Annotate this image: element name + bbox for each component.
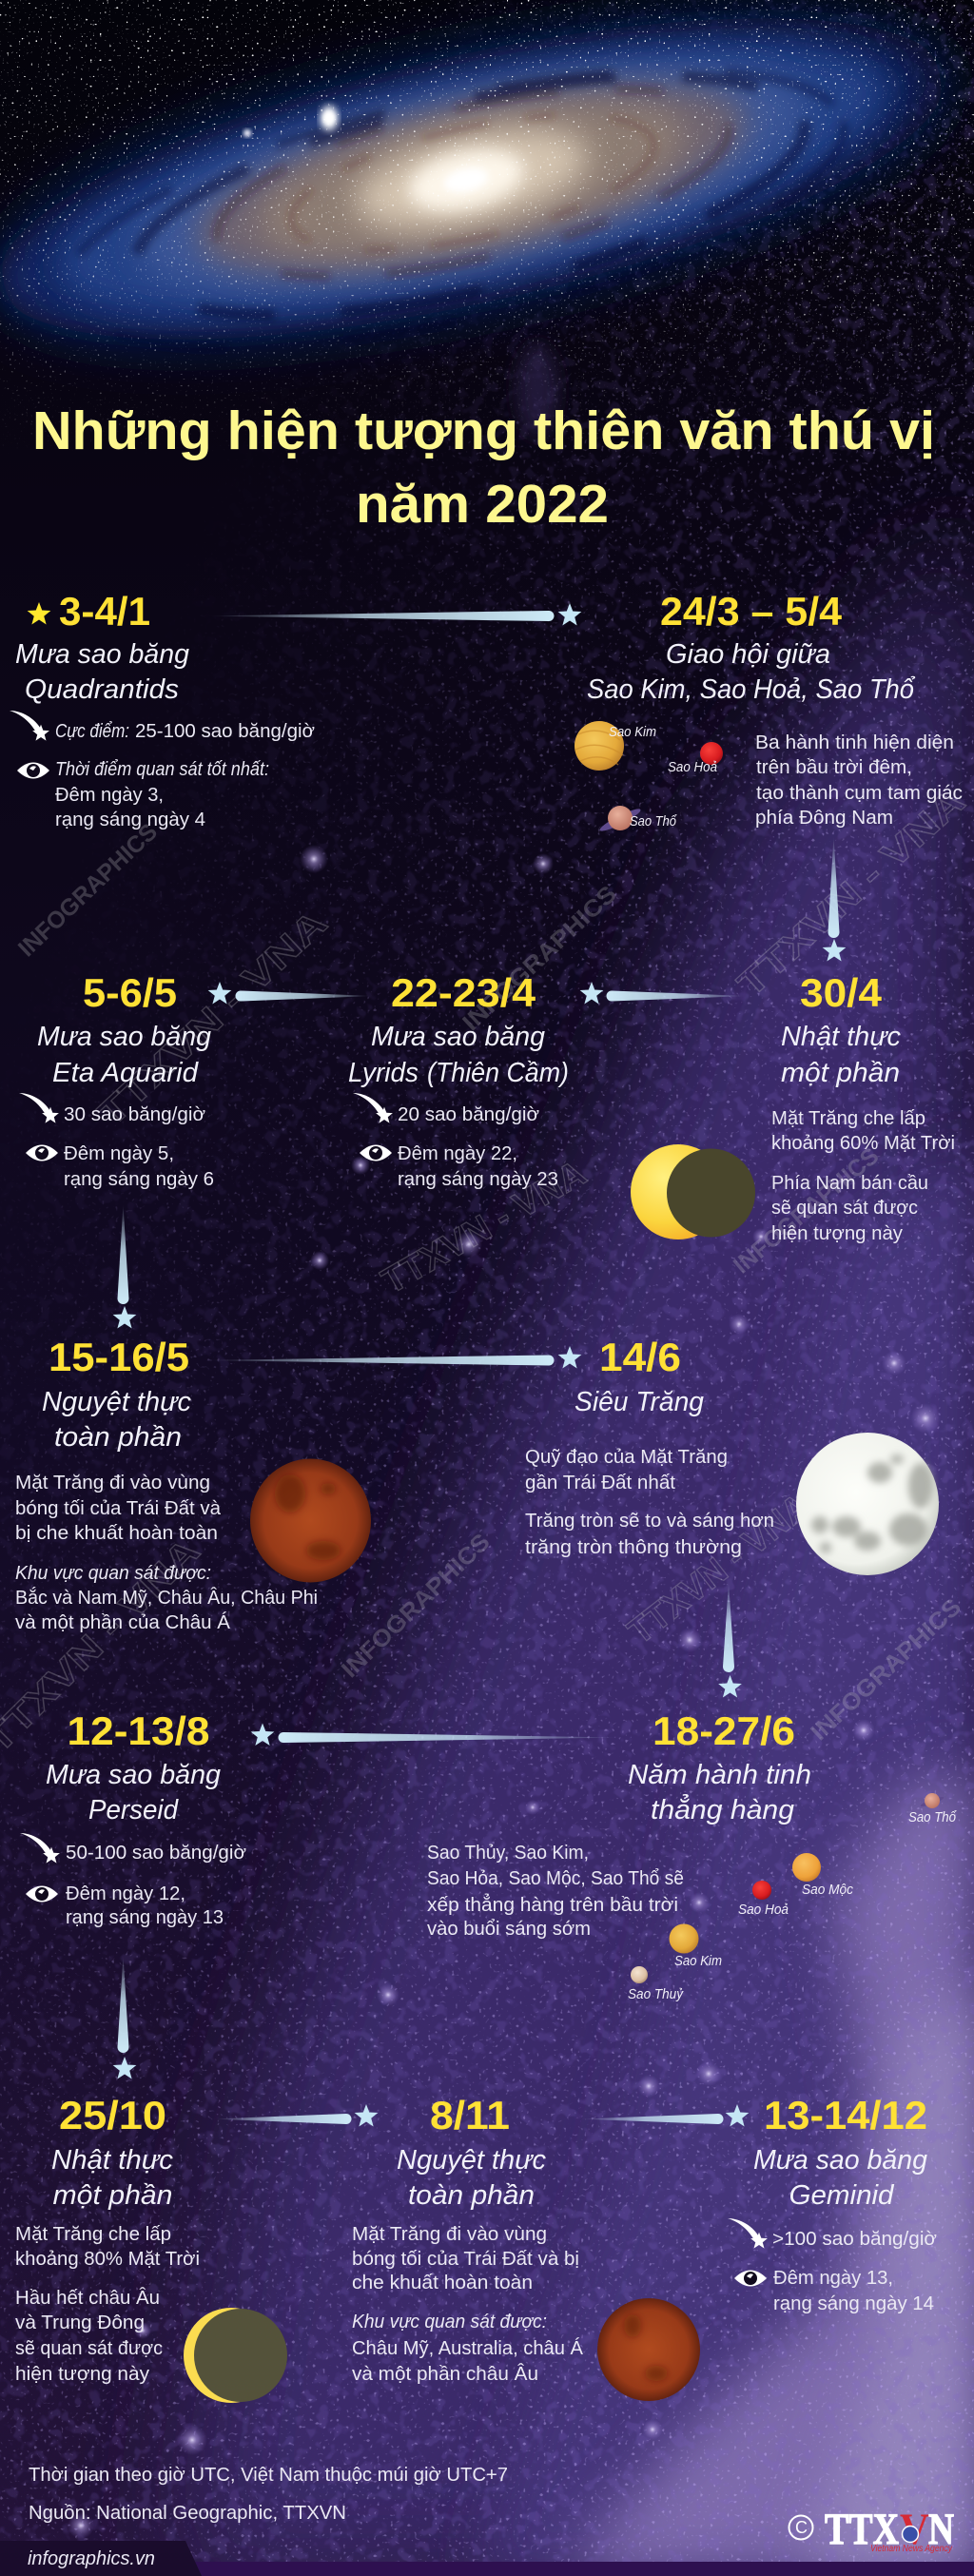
panel: total lunar eclipse 15-16/5 bbox=[15, 1335, 371, 1633]
footnote: time zone and source: Nguồn: National Geographic, TTXVN bbox=[29, 2503, 346, 2524]
description: gần Trái Đất nhất bbox=[525, 1473, 675, 1493]
heading: (Thiên Cầm) bbox=[427, 1058, 569, 1088]
photo: spiral galaxy bbox=[0, 0, 974, 457]
heading: Sao Kim, Sao Hoả, Sao Thổ bbox=[587, 674, 916, 705]
illustration: partial eclipse bbox=[184, 2308, 287, 2403]
viewing time: Đêm ngày 13, bbox=[773, 2268, 893, 2289]
arrow: 24/3 to 30/4 bbox=[823, 836, 846, 962]
arrow: 12-13/8 to 25/10 bbox=[113, 1956, 136, 2079]
description bbox=[15, 2224, 200, 2385]
description: Mặt Trăng che lấp bbox=[771, 1108, 925, 1129]
planet: Venus bbox=[670, 1923, 722, 1969]
rate: 20 sao băng/giờ bbox=[398, 1104, 539, 1125]
watermarks: TTXVN - VNA bbox=[90, 903, 335, 1135]
watermarks: INFOGRAPHICS bbox=[337, 1529, 496, 1683]
heading bbox=[397, 2145, 546, 2211]
watermarks: TTXVN - VNA bbox=[730, 781, 973, 1005]
heading: Lyrids bbox=[348, 1058, 419, 1088]
viewing time bbox=[773, 2268, 934, 2314]
date: 25/10 bbox=[59, 2093, 166, 2137]
logo: TTXVN bbox=[789, 2505, 954, 2554]
date: 3-4/1 bbox=[59, 589, 150, 634]
date: 5-6/5 bbox=[83, 970, 177, 1015]
icon: meteor bbox=[19, 1093, 59, 1123]
viewing time: rạng sáng ngày 14 bbox=[773, 2293, 934, 2314]
footer bar: infographics.vn bbox=[28, 2548, 155, 2569]
watermarks: INFOGRAPHICS bbox=[729, 1142, 884, 1279]
viewing time bbox=[66, 1883, 224, 1928]
description: Bắc và Nam Mỹ, Châu Âu, Châu Phi bbox=[15, 1587, 318, 1609]
description: Mặt Trăng đi vào vùng bbox=[15, 1473, 210, 1493]
description: Hầu hết châu Âu bbox=[15, 2287, 160, 2309]
peak rate: 25-100 sao băng/giờ bbox=[135, 721, 315, 742]
best viewing time: Thời điểm quan sát tốt nhất: bbox=[55, 759, 269, 780]
planet: Mercury: Sao Thuỷ bbox=[628, 1986, 684, 2002]
planet: Mars bbox=[738, 1881, 789, 1918]
heading: Perseid bbox=[88, 1795, 179, 1825]
description: sẽ quan sát được bbox=[15, 2338, 163, 2359]
watermarks: INFOGRAPHICS bbox=[458, 881, 622, 1036]
arrow: 3-4/1 to 24/3 bbox=[205, 603, 581, 626]
viewing time: Đêm ngày 5, bbox=[64, 1143, 174, 1164]
description: Sao Thủy, Sao Kim, bbox=[427, 1843, 589, 1864]
heading: Giao hội giữa bbox=[666, 639, 830, 670]
planet: Jupiter: Sao Mộc bbox=[802, 1882, 853, 1898]
footer bar bbox=[0, 2541, 974, 2576]
viewing time: rạng sáng ngày 23 bbox=[398, 1169, 558, 1190]
description: che khuất hoàn toàn bbox=[352, 2273, 533, 2293]
footnote: time zone and source bbox=[29, 2465, 508, 2524]
planet: Mars: Sao Hoả bbox=[668, 759, 717, 775]
rate: 50-100 sao băng/giờ bbox=[66, 1843, 246, 1864]
planet: Saturn: Sao Thổ bbox=[630, 813, 677, 829]
heading bbox=[51, 2145, 173, 2211]
icon: eye bbox=[734, 2270, 767, 2287]
description: phía Đông Nam bbox=[755, 808, 893, 829]
title bbox=[32, 400, 935, 535]
viewing time bbox=[398, 1143, 558, 1190]
watermarks: INFOGRAPHICS bbox=[806, 1593, 966, 1746]
icon: eye bbox=[17, 763, 49, 778]
date: 12-13/8 bbox=[67, 1708, 209, 1753]
peak rate bbox=[55, 721, 315, 742]
heading: Mưa sao băng bbox=[371, 1022, 545, 1052]
heading: Siêu Trăng bbox=[575, 1387, 704, 1417]
description: Quỹ đạo của Mặt Trăng bbox=[525, 1447, 728, 1468]
description: sẽ quan sát được bbox=[771, 1198, 918, 1219]
footnote: time zone and source: Thời gian theo giờ UTC, Việt Nam thuộc múi giờ UTC+7 bbox=[29, 2465, 508, 2486]
date: 30/4 bbox=[800, 970, 883, 1015]
watermarks: INFOGRAPHICS bbox=[13, 818, 163, 962]
heading bbox=[348, 1022, 569, 1088]
viewing time bbox=[64, 1143, 214, 1190]
arrow: 15-16/5 to 14/6 bbox=[202, 1346, 581, 1369]
arrow: 25/10 to 8/11 bbox=[214, 2104, 378, 2127]
planet: Saturn: Sao Thổ bbox=[908, 1809, 957, 1825]
heading bbox=[753, 2145, 927, 2211]
arrow: 22-23/4 to 5-6/5 bbox=[208, 982, 373, 1005]
viewing time: Đêm ngày 22, bbox=[398, 1143, 517, 1164]
icon: eye bbox=[360, 1145, 392, 1161]
date: 13-14/12 bbox=[764, 2093, 927, 2137]
illustration: blood moon bbox=[597, 2298, 700, 2401]
best viewing time: rạng sáng ngày 4 bbox=[55, 810, 205, 830]
heading bbox=[587, 639, 916, 705]
heading: Nhật thực bbox=[51, 2145, 173, 2176]
description: hiện tượng này bbox=[771, 1223, 903, 1244]
logo: TTXVN: C bbox=[795, 2518, 808, 2537]
heading: thẳng hàng bbox=[651, 1793, 794, 1825]
heading: Năm hành tinh bbox=[628, 1760, 811, 1790]
arrow: 18-27/6 to 12-13/8 bbox=[251, 1724, 621, 1746]
heading: toàn phần bbox=[54, 1422, 182, 1453]
panel: five planets aligned 18-27/6 bbox=[427, 1708, 957, 2002]
rate: 30 sao băng/giờ bbox=[64, 1104, 205, 1125]
icon: yellow star bbox=[28, 602, 50, 625]
description: vào buổi sáng sớm bbox=[427, 1919, 591, 1940]
icon: meteor bbox=[20, 1833, 60, 1864]
description: trăng tròn thông thường bbox=[525, 1537, 742, 1558]
panel: supermoon 14/6 bbox=[525, 1335, 939, 1575]
illustration: partial eclipse bbox=[631, 1144, 755, 1239]
panel: planet conjunction 24/3 - 5/4 bbox=[575, 589, 963, 834]
rate: >100 sao băng/giờ bbox=[772, 2229, 937, 2250]
logo: TTXVN: Vietnam News Agency bbox=[870, 2544, 953, 2554]
heading: Mưa sao băng bbox=[753, 2145, 927, 2176]
date: 8/11 bbox=[430, 2093, 510, 2137]
panel: Perseid 12-13/8 bbox=[20, 1708, 246, 1928]
planet: Saturn bbox=[598, 806, 677, 834]
panel: Quadrantids 3-4/1 bbox=[10, 589, 315, 830]
arrow: 5-6/5 to 15-16/5 bbox=[113, 1204, 136, 1329]
title: Những hiện tượng thiên văn thú vị bbox=[32, 400, 935, 461]
description bbox=[352, 2224, 584, 2385]
panel: Lyrids 22-23/4 bbox=[348, 970, 569, 1190]
description: Mặt Trăng đi vào vùng bbox=[352, 2224, 547, 2245]
heading bbox=[15, 639, 189, 705]
date: 22-23/4 bbox=[391, 970, 536, 1015]
description: Châu Mỹ, Australia, châu Á bbox=[352, 2337, 584, 2359]
best viewing time: Đêm ngày 3, bbox=[55, 785, 164, 806]
date: 14/6 bbox=[599, 1335, 681, 1379]
description: Trăng tròn sẽ to và sáng hơn bbox=[525, 1511, 774, 1532]
watermarks: TTXVN - VNA bbox=[621, 1486, 818, 1652]
description bbox=[755, 732, 963, 829]
heading: Mưa sao băng bbox=[15, 639, 189, 670]
heading: toàn phần bbox=[408, 2180, 535, 2211]
description: bóng tối của Trái Đất và bbox=[15, 1498, 222, 1519]
planet: Saturn bbox=[908, 1793, 957, 1825]
date: 24/3 – 5/4 bbox=[660, 589, 843, 634]
panel: total lunar eclipse 8/11 bbox=[352, 2093, 700, 2401]
logo: TTXVN: TTX bbox=[825, 2505, 899, 2554]
planet: Mercury bbox=[628, 1966, 684, 2002]
date: 18-27/6 bbox=[653, 1708, 795, 1753]
heading: một phần bbox=[53, 2180, 173, 2211]
heading bbox=[37, 1022, 211, 1088]
description bbox=[427, 1843, 684, 1940]
watermarks: TTXVN - VNA bbox=[375, 1153, 593, 1302]
viewing time: Đêm ngày 12, bbox=[66, 1883, 185, 1904]
arrow: 8/11 to 13-14/12 bbox=[581, 2104, 749, 2127]
description: trên bầu trời đêm, bbox=[756, 757, 912, 778]
icon: eye bbox=[26, 1885, 58, 1903]
panel: Eta Aquarid 5-6/5 bbox=[19, 970, 214, 1190]
date: 15-16/5 bbox=[49, 1335, 189, 1379]
description: và Trung Đông bbox=[15, 2313, 145, 2333]
heading: Mưa sao băng bbox=[46, 1760, 221, 1790]
description bbox=[15, 1473, 318, 1633]
icon: meteor bbox=[10, 711, 49, 741]
description: Sao Hỏa, Sao Mộc, Sao Thổ sẽ bbox=[427, 1868, 684, 1889]
description: và một phần của Châu Á bbox=[15, 1611, 231, 1633]
logo: TTXVN: V bbox=[900, 2505, 929, 2554]
planet: Venus: Sao Kim bbox=[609, 724, 656, 740]
description: Mặt Trăng che lấp bbox=[15, 2224, 171, 2245]
description: bị che khuất hoàn toàn bbox=[15, 1523, 218, 1544]
viewing time: rạng sáng ngày 13 bbox=[66, 1907, 224, 1928]
description: tạo thành cụm tam giác bbox=[756, 783, 963, 804]
panel: partial solar eclipse 30/4 bbox=[631, 970, 955, 1244]
title: năm 2022 bbox=[356, 474, 609, 535]
planet: Mars: Sao Hoả bbox=[738, 1902, 789, 1918]
arrow: 14/6 to 18-27/6 bbox=[718, 1582, 742, 1698]
icon: meteor bbox=[353, 1093, 393, 1123]
planet: Jupiter bbox=[792, 1853, 853, 1898]
description bbox=[525, 1447, 774, 1558]
heading: Nhật thực bbox=[781, 1022, 901, 1052]
description: khoảng 80% Mặt Trời bbox=[15, 2249, 200, 2270]
planet: Mars bbox=[668, 742, 723, 775]
heading bbox=[628, 1760, 811, 1825]
description bbox=[771, 1108, 955, 1244]
heading: Eta Aquarid bbox=[52, 1058, 199, 1088]
heading: Quadrantids bbox=[25, 674, 179, 705]
heading: Nguyệt thực bbox=[397, 2145, 546, 2176]
description: hiện tượng này bbox=[15, 2364, 149, 2385]
arrow: 30/4 to 22-23/4 bbox=[580, 982, 746, 1005]
viewing time: rạng sáng ngày 6 bbox=[64, 1169, 214, 1190]
icon: eye bbox=[26, 1145, 58, 1161]
description: khoảng 60% Mặt Trời bbox=[771, 1133, 955, 1154]
panel: partial solar eclipse 25/10 bbox=[15, 2093, 287, 2403]
illustration: blood moon bbox=[250, 1459, 371, 1583]
description: Khu vực quan sát được: bbox=[15, 1563, 211, 1584]
planet: Venus bbox=[575, 721, 656, 771]
heading: Nguyệt thực bbox=[42, 1387, 191, 1417]
description: Khu vực quan sát được: bbox=[352, 2312, 547, 2332]
description: Phía Nam bán cầu bbox=[771, 1173, 928, 1194]
description: và một phần châu Âu bbox=[352, 2363, 538, 2385]
planet: Venus: Sao Kim bbox=[674, 1953, 722, 1969]
heading bbox=[46, 1760, 221, 1825]
icon: meteor bbox=[728, 2218, 768, 2249]
heading: một phần bbox=[781, 1058, 900, 1088]
logo: TTXVN: N bbox=[928, 2505, 954, 2554]
description: Ba hành tinh hiện diện bbox=[755, 732, 954, 753]
peak rate: Cực điểm: bbox=[55, 721, 129, 742]
heading: Geminid bbox=[789, 2180, 894, 2211]
heading: Mưa sao băng bbox=[37, 1022, 211, 1052]
watermarks bbox=[0, 781, 973, 1761]
description: xếp thẳng hàng trên bầu trời bbox=[427, 1893, 678, 1916]
best viewing time bbox=[55, 759, 269, 830]
description: bóng tối của Trái Đất và bị bbox=[352, 2249, 579, 2270]
heading bbox=[781, 1022, 901, 1088]
heading bbox=[42, 1387, 191, 1453]
illustration: full moon bbox=[796, 1433, 939, 1575]
panel: Geminid 13-14/12 bbox=[728, 2093, 937, 2314]
